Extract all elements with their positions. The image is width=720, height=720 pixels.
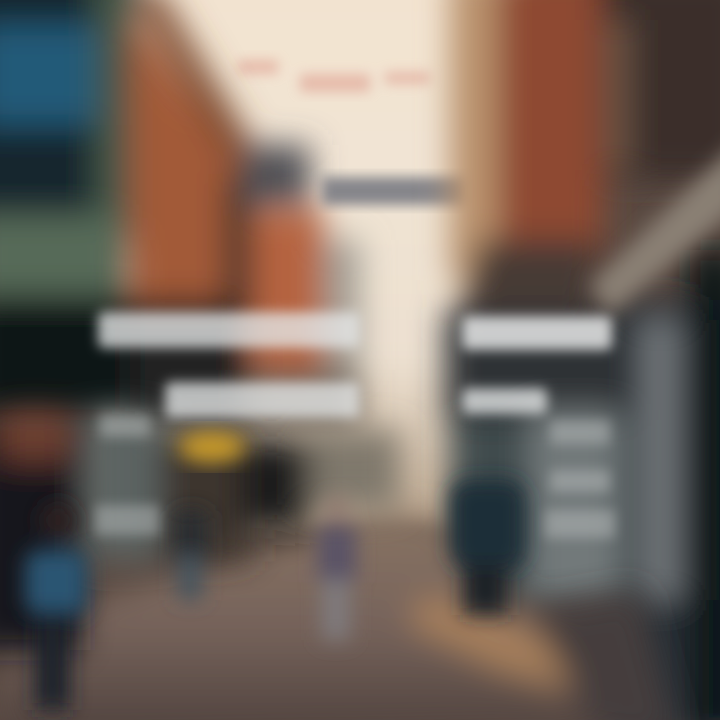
person: dark figure on right bbox=[450, 480, 525, 615]
right building group bbox=[445, 0, 720, 720]
caption line 1 right bbox=[462, 316, 612, 350]
sky bbox=[100, 0, 530, 530]
lower left shopfronts bbox=[0, 410, 400, 650]
blurred caption text bbox=[98, 312, 612, 418]
pedestrians bbox=[25, 480, 525, 710]
bright shop signs bbox=[95, 415, 615, 538]
person: centre walker bbox=[318, 497, 356, 640]
person: blue jacket on left bbox=[25, 502, 87, 710]
street ground bbox=[0, 510, 680, 720]
caption line 1 left bbox=[98, 312, 360, 348]
overhead banner across the street bbox=[322, 177, 467, 205]
caption line 2 right bbox=[462, 388, 547, 414]
caption line 2 left bbox=[165, 382, 360, 418]
yellow awning bbox=[178, 431, 246, 463]
person: mid-left walker bbox=[174, 510, 208, 600]
diagonal canopy beam on right bbox=[590, 140, 720, 315]
left building group bbox=[0, 0, 360, 430]
distant pink sign in the sky bbox=[238, 60, 430, 92]
